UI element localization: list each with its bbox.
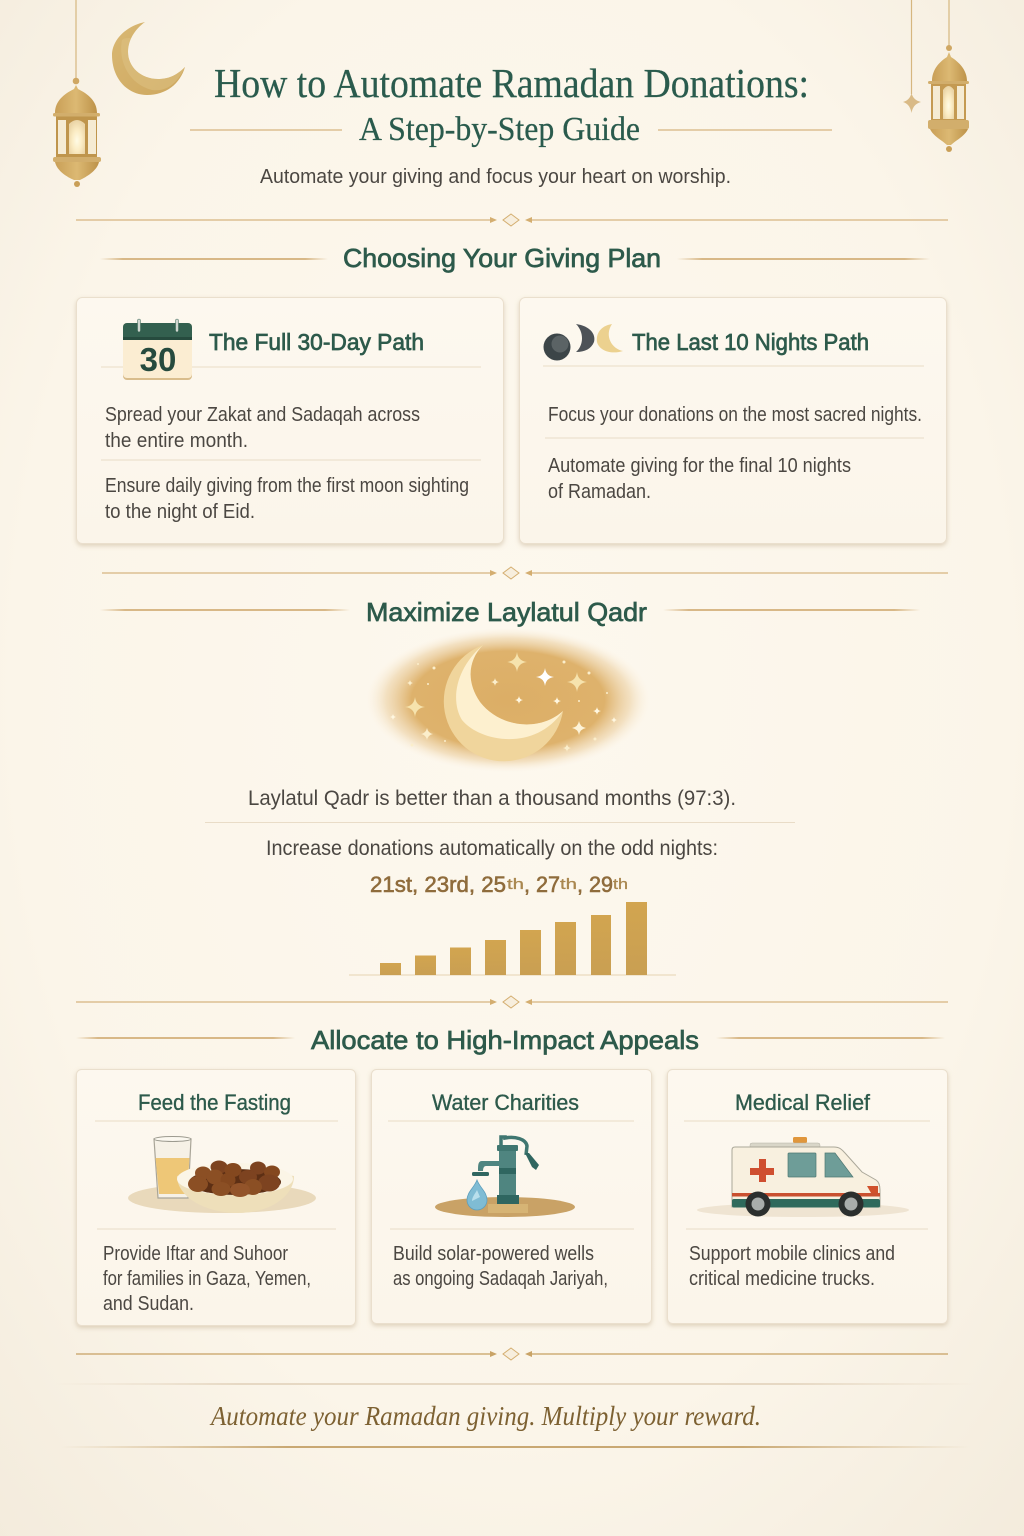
card text: Build solar-powered wells	[393, 1243, 594, 1265]
card text: first point: Spread your Zakat and Sadaqah across	[105, 404, 420, 426]
icon: calendar: 30	[140, 341, 176, 378]
card text: for families in Gaza, Yemen,	[103, 1268, 311, 1290]
panel: medical relief	[668, 1070, 948, 1324]
panel: the full 30-day path	[76, 298, 504, 544]
text: odd nights intro: Increase donations automatically on the odd nights:	[266, 837, 718, 860]
card text	[393, 1243, 608, 1290]
icon: moon phases	[544, 324, 623, 360]
card text	[689, 1243, 895, 1290]
card text: second point: Automate giving for the final 10 nights	[548, 455, 851, 477]
card text: Support mobile clinics and	[689, 1243, 895, 1265]
icon: right hanging lantern	[928, 0, 969, 152]
card text: second point	[105, 475, 469, 523]
title: How to Automate Ramadan Donations:	[214, 60, 809, 106]
card text: second point: Ensure daily giving from the first moon sighting	[105, 475, 469, 497]
icon: juice and dates	[128, 1136, 316, 1213]
card text: first point	[105, 404, 420, 452]
card text: Provide Iftar and Suhoor	[103, 1243, 288, 1265]
card text	[103, 1243, 311, 1315]
card text: first point: the entire month.	[105, 430, 248, 452]
panel: feed the fasting	[76, 1070, 356, 1326]
text: odd night dates: th	[560, 876, 577, 893]
text: odd night dates: th	[507, 876, 524, 893]
card text: second point	[548, 455, 851, 503]
card text: first point: Focus your donations on the most sacred nights.	[548, 404, 922, 426]
card title: The Last 10 Nights Path	[632, 329, 869, 355]
footer banner: Automate your Ramadan giving. Multiply your reward.	[209, 1401, 761, 1431]
panel: the last 10 nights path	[520, 298, 946, 544]
heading: maximize laylatul qadr: Maximize Laylatul Qadr	[366, 597, 647, 627]
icon: ambulance	[697, 1137, 909, 1217]
icon: small hanging star	[903, 0, 921, 113]
heading: choosing your giving plan: Choosing Your Giving Plan	[343, 243, 661, 273]
card title: Water Charities	[432, 1090, 579, 1115]
text: odd night dates: , 27	[524, 872, 560, 897]
card text: second point: of Ramadan.	[548, 481, 651, 503]
heading: allocate to high-impact appeals: Allocate to High-Impact Appeals	[311, 1025, 699, 1055]
icon: calendar	[123, 319, 192, 380]
panel: water charities	[372, 1070, 652, 1324]
illustration: glowing moon with stars	[366, 628, 650, 772]
subtitle: A Step-by-Step Guide	[359, 111, 640, 148]
icon: water pump	[435, 1137, 575, 1217]
text: odd night dates: th	[613, 876, 628, 893]
text: odd night dates: 21st, 23rd, 25	[370, 872, 506, 897]
bar chart: rising donations	[349, 902, 676, 975]
card title: Medical Relief	[735, 1090, 871, 1115]
card text: second point: to the night of Eid.	[105, 501, 255, 523]
tagline: Automate your giving and focus your heart on worship.	[260, 166, 731, 188]
card text: critical medicine trucks.	[689, 1268, 875, 1290]
card title: The Full 30-Day Path	[209, 329, 424, 355]
icon: left hanging lantern	[53, 0, 101, 187]
card text: and Sudan.	[103, 1293, 194, 1315]
card title: Feed the Fasting	[138, 1090, 291, 1115]
text: odd night dates: , 29	[577, 872, 613, 897]
text: odd night dates	[370, 872, 628, 897]
card text: as ongoing Sadaqah Jariyah,	[393, 1268, 608, 1290]
text: laylatul qadr verse: Laylatul Qadr is better than a thousand months (97:3).	[248, 787, 736, 810]
icon: gold crescent	[112, 22, 185, 95]
